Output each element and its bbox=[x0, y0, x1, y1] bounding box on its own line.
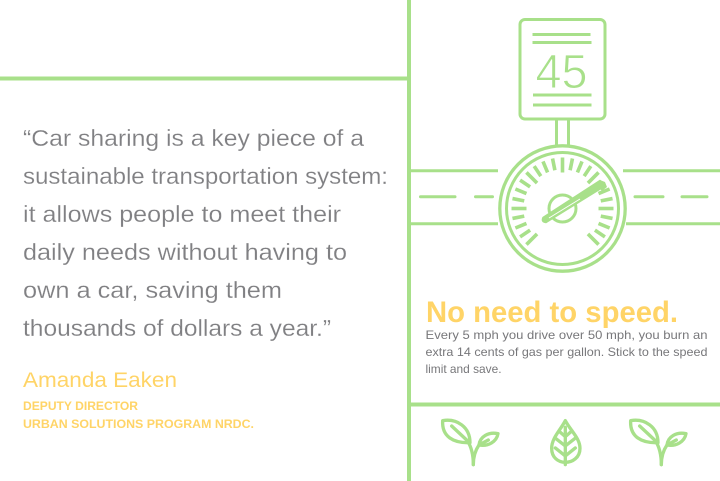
quote attribution bbox=[23, 369, 254, 431]
quote text: own a car, saving them bbox=[23, 277, 282, 303]
icon: speed limit sign bbox=[520, 20, 605, 146]
icon: sprout right bbox=[631, 420, 686, 465]
attribution name: Amanda Eaken bbox=[23, 369, 177, 392]
speed limit number: 45 bbox=[536, 46, 588, 99]
body text bbox=[426, 328, 708, 376]
heading: no need to speed: No need to speed. bbox=[426, 296, 678, 329]
road bbox=[411, 171, 720, 224]
icon: speedometer bbox=[500, 146, 625, 271]
body text: Every 5 mph you drive over 50 mph, you burn an bbox=[426, 328, 708, 342]
quote text: “Car sharing is a key piece of a bbox=[23, 125, 365, 151]
quote text: it allows people to meet their bbox=[23, 201, 341, 227]
attribution organisation: URBAN SOLUTIONS PROGRAM NRDC. bbox=[23, 417, 254, 431]
speedometer needle bbox=[542, 180, 607, 222]
body text: extra 14 cents of gas per gallon. Stick to the speed bbox=[426, 345, 708, 359]
attribution title: DEPUTY DIRECTOR bbox=[23, 399, 138, 413]
quote text: thousands of dollars a year.” bbox=[23, 315, 331, 341]
icon: sprout left bbox=[443, 420, 498, 465]
body text: limit and save. bbox=[426, 362, 502, 376]
icon: leaf bbox=[552, 421, 580, 465]
quote text: sustainable transportation system: bbox=[23, 163, 388, 189]
speedometer hub bbox=[549, 195, 576, 222]
quote text: daily needs without having to bbox=[23, 239, 347, 265]
quote text bbox=[23, 125, 388, 341]
